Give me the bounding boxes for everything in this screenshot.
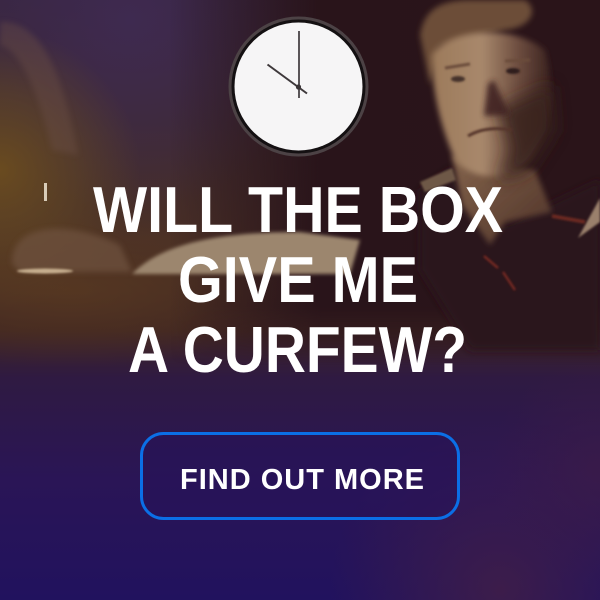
headline [93,173,503,386]
lower right face shadow [498,84,556,182]
clock [230,18,367,155]
button outline [142,434,458,518]
hair [420,0,532,85]
button: find out more [142,434,458,518]
neck and chest [452,155,552,245]
shirt collar [578,198,600,238]
nose shadow [484,80,510,116]
hour hand [268,64,307,94]
shirt [420,168,600,350]
face [432,32,551,176]
person in passenger seat [420,0,600,350]
headline: A CURFEW? [128,313,467,386]
clock pivot [296,84,301,90]
button label: FIND OUT MORE [180,464,424,496]
shirt check lines [484,256,515,290]
headline: WILL THE BOX [93,173,503,246]
clock face [234,22,362,150]
minute hand [298,31,300,98]
mouth [468,129,512,136]
eyes [451,76,465,82]
clock rim [230,18,367,155]
headline: GIVE ME [178,243,418,316]
